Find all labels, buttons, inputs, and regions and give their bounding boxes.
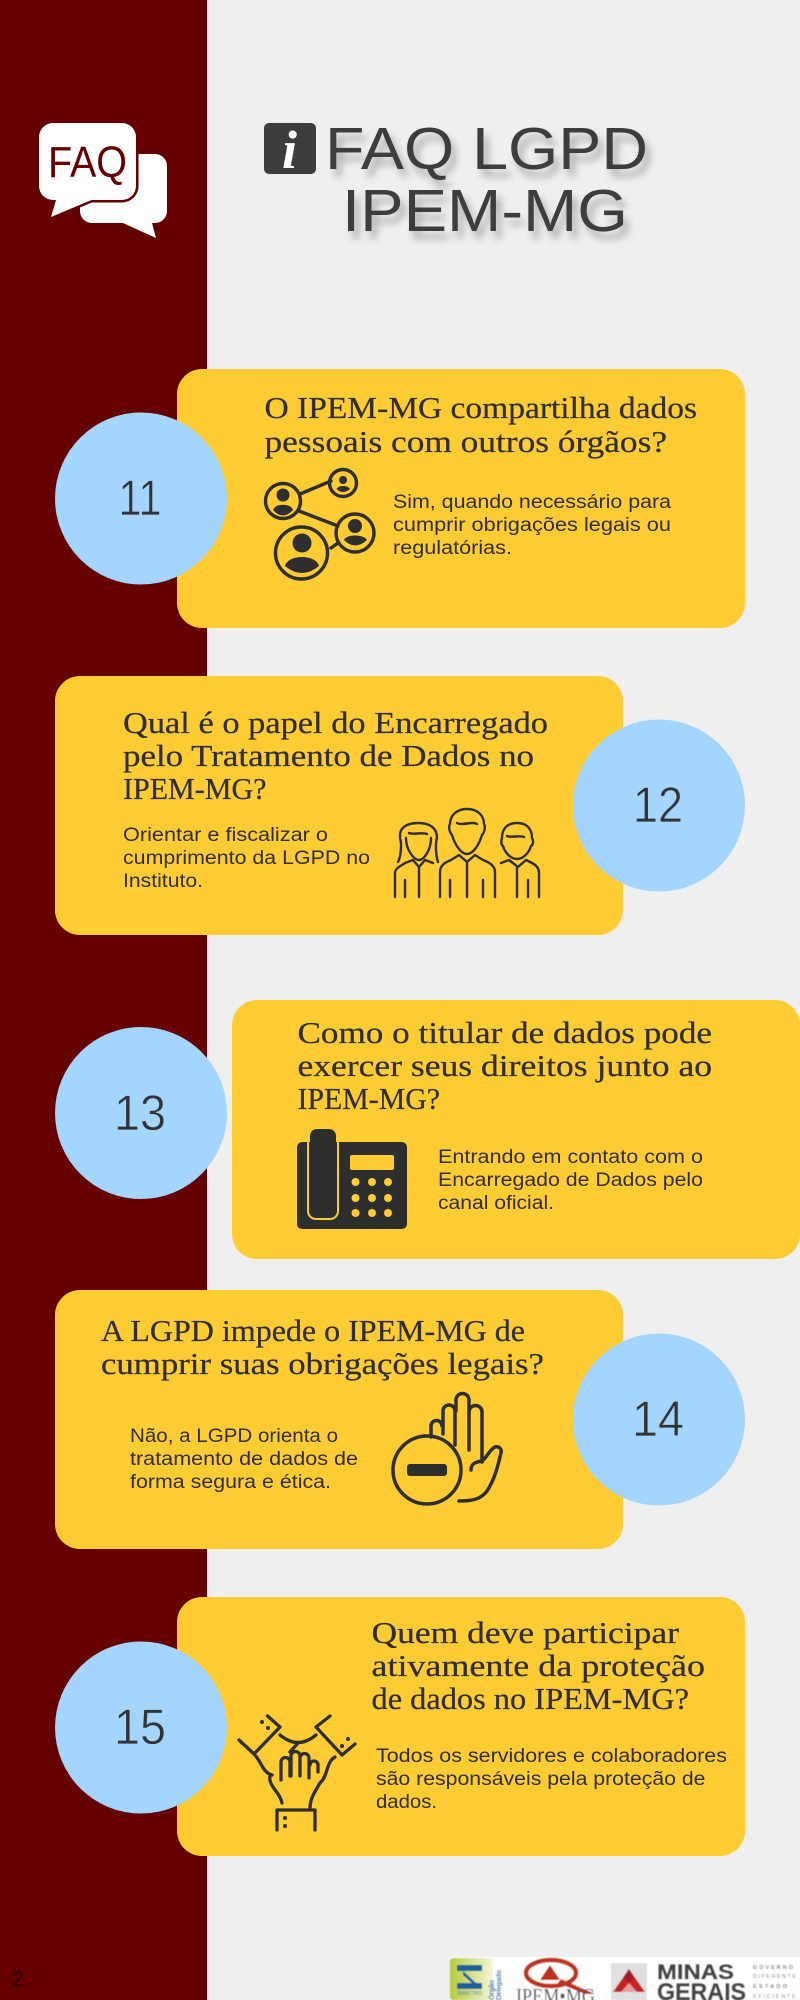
number badge 12: 12 — [633, 777, 683, 833]
answer text: Todos os servidores e colaboradores — [376, 1746, 727, 1767]
icon: connected people network — [266, 470, 374, 579]
heading: ativamente da proteção — [372, 1648, 705, 1683]
number badge 14: 14 — [632, 1391, 684, 1447]
answer text — [376, 1746, 727, 1813]
title: IPEM-MG — [342, 178, 628, 244]
heading: pelo Tratamento de Dados no — [123, 738, 534, 773]
answer text — [123, 825, 370, 892]
icon: information: i — [282, 120, 297, 180]
answer text — [438, 1147, 703, 1214]
logo: Minas Gerais government: ESTADO — [753, 1984, 788, 1990]
number badge 13: 13 — [114, 1085, 166, 1141]
number badge 15 — [55, 1642, 227, 1814]
logo: Minas Gerais government: DIFERENTE. — [753, 1974, 799, 1980]
logo: IPEM-MG — [516, 1960, 595, 2000]
panel: question 15 — [55, 1597, 745, 1856]
answer text: forma segura e ética. — [130, 1472, 331, 1493]
title — [325, 116, 648, 244]
answer text: são responsáveis pela proteção de — [376, 1769, 706, 1790]
heading: pessoais com outros órgãos? — [264, 424, 667, 459]
number badge 12 — [573, 720, 745, 892]
icon: group of three people — [395, 809, 539, 897]
icon: FAQ speech bubbles: FAQ — [48, 138, 127, 187]
number badge 11 — [55, 412, 227, 584]
heading — [372, 1615, 705, 1716]
answer text: Entrando em contato com o — [438, 1147, 703, 1168]
panel: question 14 — [55, 1290, 745, 1549]
heading: Como o titular de dados pode — [298, 1015, 712, 1050]
heading — [123, 705, 548, 806]
number badge 11: 11 — [118, 470, 162, 526]
answer text: canal oficial. — [438, 1193, 554, 1214]
answer text: Encarregado de Dados pelo — [438, 1170, 703, 1191]
logo: Inmetro delegated body — [450, 1958, 503, 2000]
page number: 2 — [12, 1969, 23, 1991]
heading: de dados no IPEM-MG? — [372, 1681, 689, 1716]
answer text: Orientar e fiscalizar o — [123, 825, 328, 846]
answer text: regulatórias. — [393, 538, 512, 559]
icon: desk telephone — [297, 1129, 407, 1229]
answer text: cumprimento da LGPD no — [123, 848, 370, 869]
heading: Qual é o papel do Encarregado — [123, 705, 548, 740]
answer text: Instituto. — [123, 871, 203, 892]
heading — [101, 1313, 544, 1381]
panel: question 13 — [55, 1000, 800, 1259]
logo: Inmetro delegated body: Delegado — [496, 1970, 503, 2000]
heading: O IPEM-MG compartilha dados — [264, 390, 697, 425]
logo: Inmetro delegated body: Órgão — [487, 1980, 496, 2000]
number badge 15: 15 — [114, 1699, 166, 1755]
title: FAQ LGPD — [325, 116, 648, 182]
answer text: Sim, quando necessário para — [393, 492, 671, 513]
logo: Minas Gerais government: GOVERNO — [753, 1965, 794, 1971]
heading: IPEM-MG? — [123, 771, 266, 806]
answer text: dados. — [376, 1792, 437, 1813]
logo: Minas Gerais government — [611, 1961, 799, 2000]
number badge 13 — [55, 1027, 227, 1199]
answer text — [130, 1426, 358, 1493]
heading: exercer seus direitos junto ao — [298, 1048, 712, 1083]
number badge 14 — [573, 1334, 745, 1506]
logo: Minas Gerais government: MINAS — [657, 1961, 734, 1984]
answer text: tratamento de dados de — [130, 1449, 358, 1470]
heading — [264, 390, 697, 459]
heading: A LGPD impede o IPEM-MG de — [101, 1313, 525, 1348]
logo: Inmetro delegated body: INMETRO — [457, 1991, 482, 1997]
heading: Quem deve participar — [372, 1615, 680, 1650]
heading: cumprir suas obrigações legais? — [101, 1346, 544, 1381]
icon: raised hand with minus sign — [393, 1394, 501, 1504]
answer text: Não, a LGPD orienta o — [130, 1426, 338, 1447]
icon: information — [264, 120, 316, 180]
heading: IPEM-MG? — [298, 1081, 440, 1116]
footer logo strip — [450, 1957, 800, 2000]
left maroon band — [0, 0, 207, 2000]
panel: question 11 — [55, 369, 745, 628]
icon: hands joined together — [239, 1716, 355, 1830]
answer text: cumprir obrigações legais ou — [393, 515, 671, 536]
icon: FAQ speech bubbles — [39, 123, 167, 238]
logo: Minas Gerais government: EFICIENTE. — [753, 1994, 799, 2000]
heading — [298, 1015, 712, 1116]
panel: question 12 — [55, 676, 745, 935]
answer text — [393, 492, 671, 559]
